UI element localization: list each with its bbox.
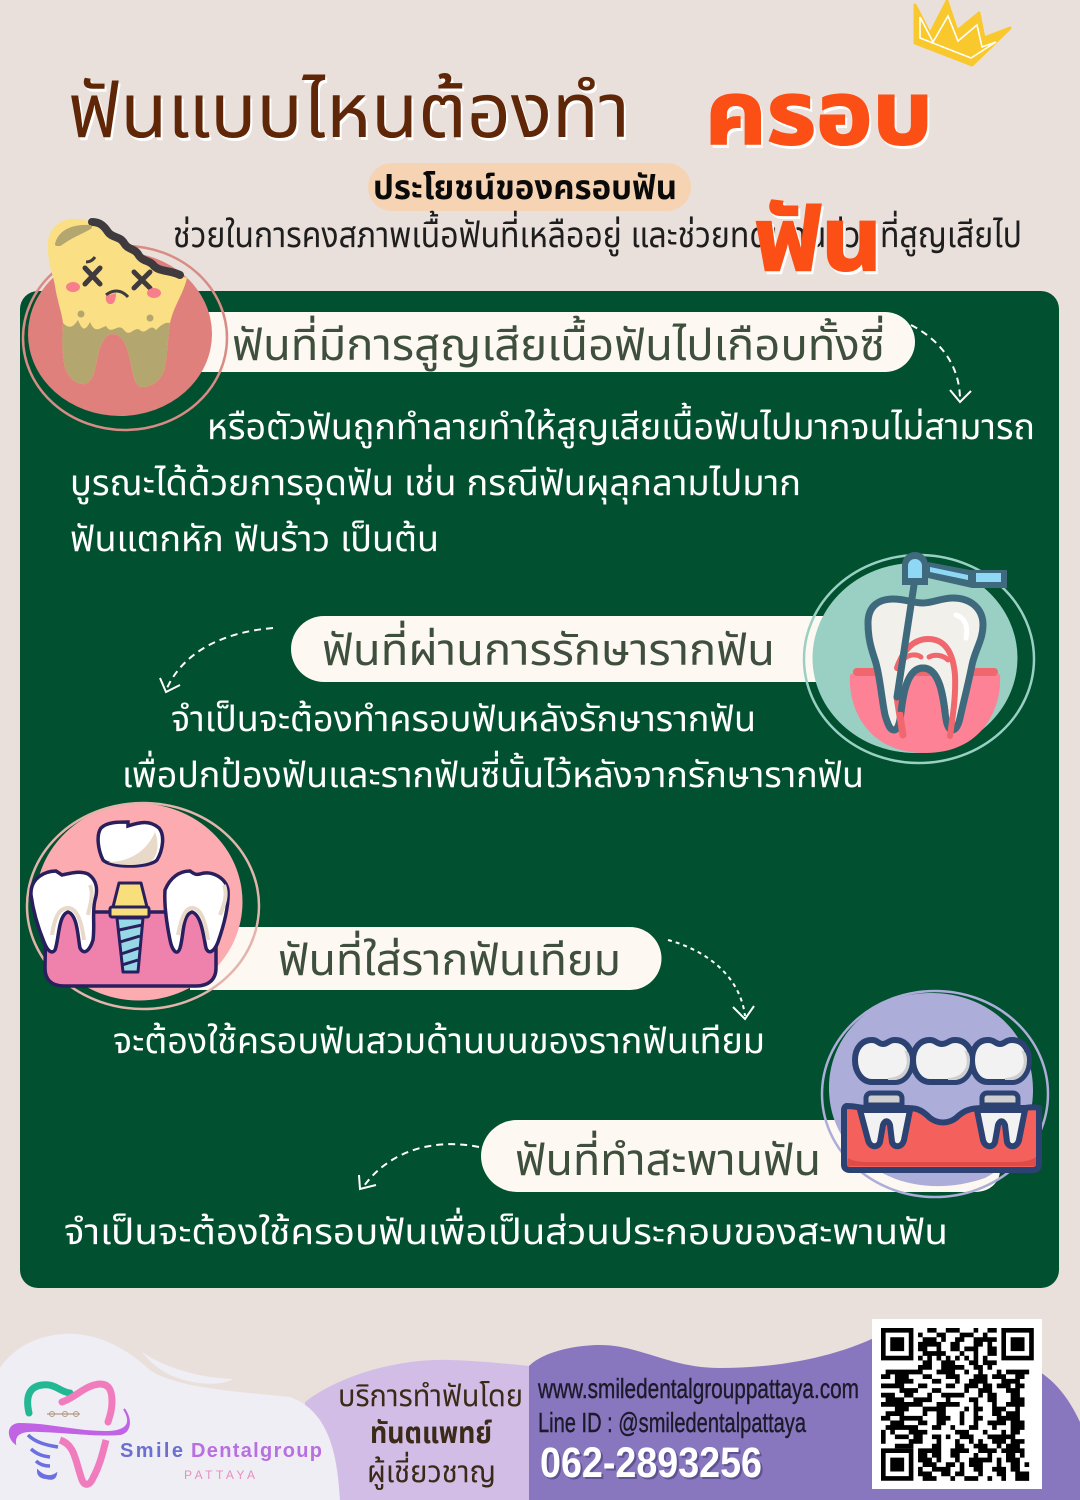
section 1 text: บูรณะได้ด้วยการอุดฟัน เช่น กรณีฟันผุลุกลามไปมาก [70, 462, 801, 504]
section 3 text: จะต้องใช้ครอบฟันสวมด้านบนของรากฟันเทียม [113, 1020, 765, 1061]
icon: dental implant [27, 803, 259, 1009]
section 2 text [122, 698, 864, 795]
footer service text: ผู้เชี่ยวชาญ [367, 1451, 496, 1490]
section 1 text: หรือตัวฟันถูกทำลายทำให้สูญเสียเนื้อฟันไปมากจนไม่สามารถ [207, 402, 1035, 448]
logo [10, 1384, 322, 1484]
arrow 2 [160, 628, 273, 692]
section 1 text: ฟันแตกหัก ฟันร้าว เป็นต้น [70, 518, 439, 559]
title highlight: ครอบ [705, 64, 933, 163]
footer: lilac blob [305, 1360, 530, 1500]
benefit heading pill: ประโยชน์ของครอบฟัน [373, 169, 677, 207]
footer service text: ทันตแพทย์ [370, 1417, 492, 1450]
title: ฟันแบบไหนต้องทำ [68, 69, 630, 154]
icon: crown [915, 1, 1010, 65]
section 1 text [70, 402, 1035, 559]
logo: Smile [120, 1440, 184, 1462]
arrow 4 [359, 1144, 479, 1189]
section 1 heading pill: ฟันที่มีการสูญเสียเนื้อฟันไปเกือบทั้งซี่ [232, 315, 885, 372]
logo: Dentalgroup [191, 1440, 322, 1462]
title highlight: ฟัน [754, 190, 882, 289]
footer: purple blob [529, 1335, 1080, 1500]
contact text: Line ID : @smiledentalpattaya [538, 1407, 806, 1438]
logo: PATTAYA [184, 1468, 255, 1482]
title highlight [705, 64, 933, 289]
contact text [537, 1373, 859, 1487]
QR code [872, 1319, 1042, 1489]
section 2 heading pill: ฟันที่ผ่านการรักษารากฟัน [322, 620, 775, 675]
panel: main green [20, 291, 1059, 1288]
contact text: www.smiledentalgrouppattaya.com [537, 1373, 859, 1404]
section 2 text: จำเป็นจะต้องทำครอบฟันหลังรักษารากฟัน [171, 698, 756, 739]
arrow 3 [668, 940, 754, 1019]
icon: root canal tooth [804, 552, 1034, 763]
section 2 heading pill [291, 616, 840, 682]
section 4 heading pill: ฟันที่ทำสะพานฟัน [515, 1130, 821, 1185]
icon: decayed tooth [23, 219, 227, 430]
icon: dental bridge [822, 991, 1048, 1197]
arrow 1 [911, 325, 971, 402]
contact text: 062-2893256 [540, 1439, 762, 1487]
footer service text [338, 1380, 523, 1490]
footer service text: บริการทำฟันโดย [338, 1380, 523, 1413]
section 2 text: เพื่อปกป้องฟันและรากฟันซี่นั้นไว้หลังจากรักษารากฟัน [122, 750, 864, 795]
section 3 heading pill [190, 927, 662, 990]
footer: logo blob [0, 1334, 340, 1500]
section 4 heading pill [481, 1120, 1000, 1192]
section 4 text: จำเป็นจะต้องใช้ครอบฟันเพื่อเป็นส่วนประกอบของสะพานฟัน [64, 1207, 948, 1252]
footer: swoosh [142, 1352, 233, 1384]
section 3 heading pill: ฟันที่ใส่รากฟันเทียม [278, 930, 621, 985]
